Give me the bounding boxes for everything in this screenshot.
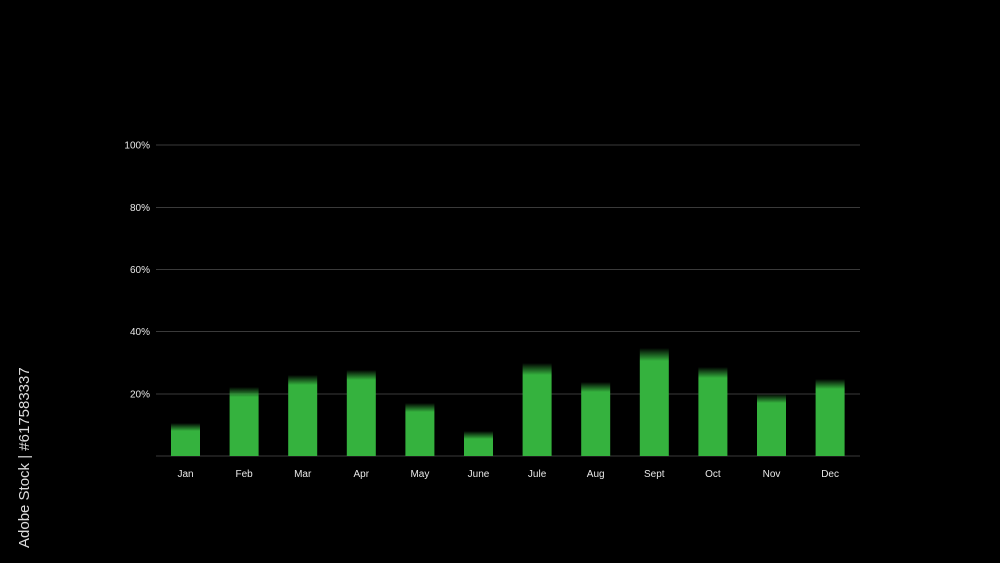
x-axis month labels [177, 469, 839, 480]
x-axis month labels: June [468, 469, 490, 480]
x-axis month labels: Dec [821, 469, 839, 480]
x-axis month labels: Sept [644, 469, 665, 480]
bar chart [171, 348, 845, 456]
x-axis month labels: Jule [528, 469, 547, 480]
x-axis month labels: Apr [354, 469, 370, 480]
grid and y-axis labels: 40% [130, 327, 150, 338]
x-axis month labels: Mar [294, 469, 312, 480]
grid and y-axis labels: 20% [130, 390, 150, 400]
grid and y-axis labels: 80% [130, 203, 150, 214]
x-axis month labels: Feb [235, 469, 253, 480]
x-axis month labels: Aug [587, 469, 605, 480]
grid and y-axis labels: 60% [130, 265, 150, 276]
grid and y-axis labels [124, 140, 860, 456]
stock id vertical text: Adobe Stock | #617583337 [16, 367, 33, 548]
x-axis month labels: Nov [763, 469, 780, 480]
x-axis month labels: Oct [705, 469, 721, 480]
x-axis month labels: May [410, 469, 429, 480]
grid and y-axis labels: 100% [124, 140, 150, 152]
x-axis month labels: Jan [177, 469, 194, 480]
